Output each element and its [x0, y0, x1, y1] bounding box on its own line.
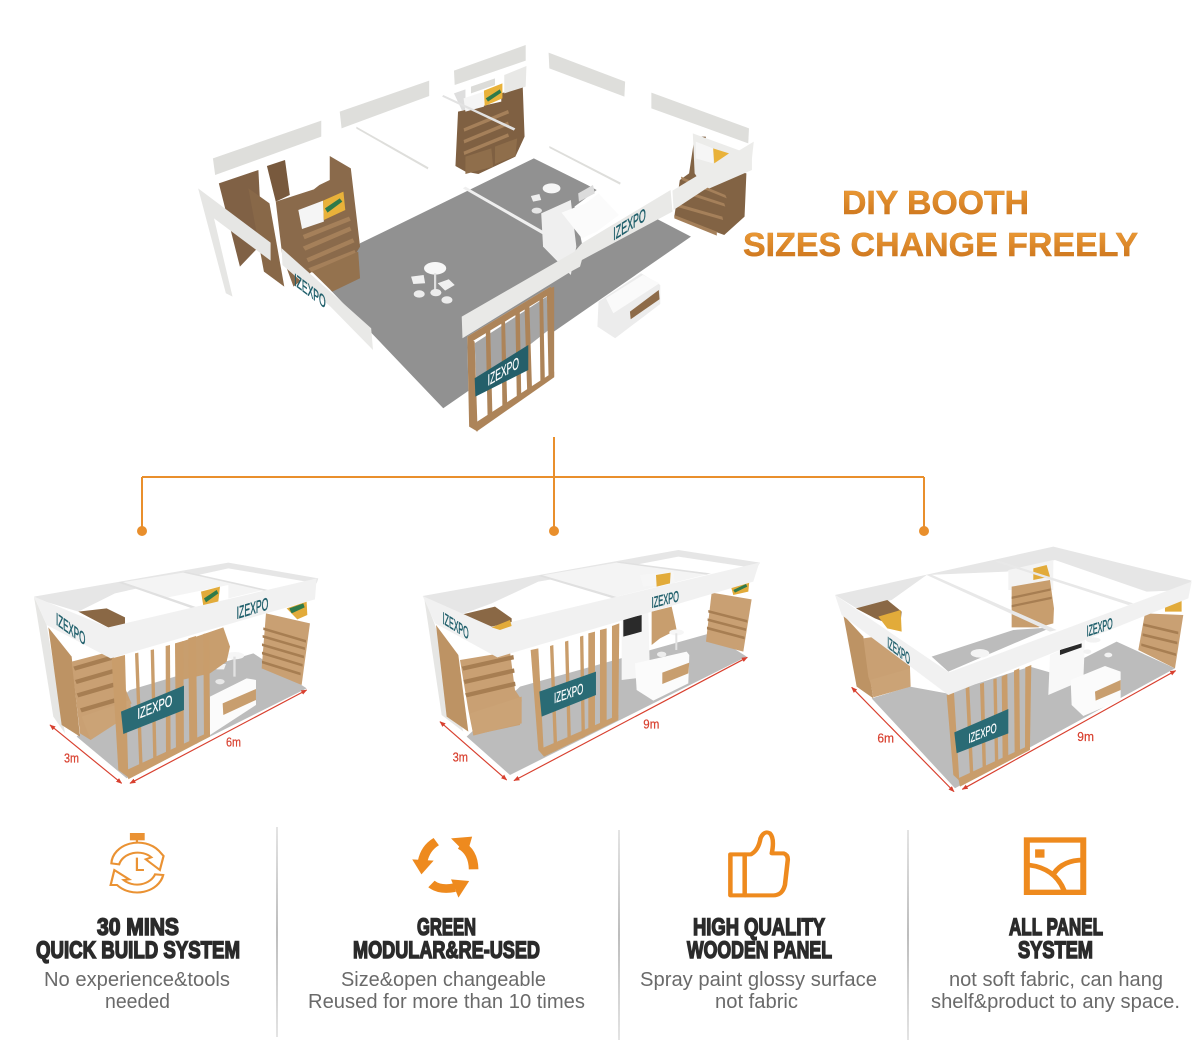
grey floor: [330, 158, 691, 408]
white header: IZEXPO: [1087, 616, 1113, 641]
white header: IZEXPO: [56, 609, 85, 650]
white header: [34, 578, 317, 658]
icon: recycle arrows: [412, 837, 474, 898]
front wood lattice with banner: IZEXPO: [488, 353, 519, 389]
reception: [210, 678, 256, 735]
white header: IZEXPO: [237, 594, 268, 623]
wood display left: [843, 600, 911, 698]
heading: ALL PANEL: [1009, 914, 1103, 941]
feature: wooden panel: not fabric: [715, 991, 798, 1013]
stools: [657, 629, 684, 657]
left front header with logo: IZEXPO: [294, 270, 326, 313]
back shelves: [652, 607, 677, 645]
reception counter: [597, 273, 660, 338]
teal banner: IZEXPO: [137, 693, 172, 723]
feature: all panel: SYSTEM: [1018, 937, 1093, 964]
wood lattice: [112, 633, 210, 779]
booth 3m x 6m: [34, 563, 318, 783]
heading: 30 MINS: [97, 914, 179, 941]
table: [213, 652, 244, 684]
dimension arrows: 6m: [226, 736, 241, 750]
teal banner: IZEXPO: [554, 681, 583, 707]
white header: IZEXPO: [443, 609, 469, 643]
feature: green modular: [308, 837, 585, 1013]
teal banner: [539, 672, 596, 717]
feature: quick build: QUICK BUILD SYSTEM: [36, 937, 240, 964]
dimension arrows: [852, 671, 1176, 792]
reception: [1071, 666, 1121, 716]
title: DIY BOOTH: [842, 184, 1029, 221]
description: Size&open changeable: [341, 969, 546, 991]
booth 6m x 9m: [835, 547, 1192, 792]
wood lattice: [947, 665, 1031, 787]
title: SIZES CHANGE FREELY: [743, 226, 1138, 263]
feature: wooden panel: WOODEN PANEL: [687, 937, 832, 964]
connector lines: [137, 437, 929, 536]
table set in back room: [531, 183, 560, 214]
feature: quick build: [36, 834, 240, 1013]
front right header with logo: [462, 190, 672, 338]
white partition with screen: [622, 612, 650, 680]
teal banner: [121, 686, 184, 734]
white partition: [1048, 640, 1085, 695]
stools: [971, 637, 1112, 658]
white header: [423, 563, 759, 657]
dividers: [276, 827, 909, 1040]
left front header with logo: [282, 248, 373, 350]
back shelf: [1012, 580, 1054, 627]
white header: [835, 561, 1192, 695]
wood display right: [262, 602, 310, 685]
icon: picture panel: [1027, 840, 1083, 892]
white header: IZEXPO: [652, 588, 679, 612]
table and chairs: [411, 262, 455, 304]
partition beam: [463, 187, 559, 242]
feature: quick build: needed: [105, 991, 170, 1013]
right far header: [672, 142, 754, 210]
teal banner: [954, 709, 1008, 753]
centre wood shelf unit: [442, 66, 526, 174]
wood lattice: [531, 623, 619, 757]
description: not soft fabric, can hang: [949, 969, 1163, 991]
left wall frame: [198, 188, 271, 297]
top opening sign: [492, 620, 512, 630]
feature: all panel: shelf&product to any space.: [931, 991, 1180, 1013]
dimension arrows: [50, 690, 307, 783]
wood display left: [436, 607, 522, 736]
feature: green modular: Reused for more than 10 times: [308, 991, 585, 1013]
dimension arrows: 6m: [877, 731, 894, 745]
description: No experience&tools: [44, 969, 230, 991]
feature: wooden panel: [640, 832, 877, 1013]
icon: thumbs up: [730, 832, 788, 895]
feature: all panel: [931, 840, 1180, 1013]
dimension arrows: 9m: [1077, 730, 1094, 744]
heading: HIGH QUALITY: [693, 914, 825, 941]
icon: stopwatch with arrows: [111, 834, 164, 892]
description: Spray paint glossy surface: [640, 969, 877, 991]
front right header with logo: IZEXPO: [613, 205, 646, 245]
right shelf unit: [674, 133, 752, 236]
dimension arrows: 3m: [64, 751, 79, 765]
centre white wall: [541, 185, 619, 275]
reception: [635, 652, 689, 701]
left wood panels: [219, 156, 360, 292]
white header: IZEXPO: [887, 632, 910, 669]
booth 3m x 9m: [423, 550, 760, 781]
dimension arrows: [440, 657, 747, 781]
dimension arrows: 3m: [453, 751, 468, 765]
feature: green modular: MODULAR&RE-USED: [353, 937, 540, 964]
dimension arrows: 9m: [643, 717, 659, 731]
back shelves: [182, 627, 230, 680]
main exploded booth illustration: [198, 45, 754, 432]
title: [743, 184, 1138, 263]
wood display right: [1138, 600, 1183, 668]
front wood lattice with banner: [467, 287, 554, 432]
detached header panels: [213, 45, 749, 185]
teal banner: IZEXPO: [968, 719, 997, 746]
heading: GREEN: [417, 914, 476, 941]
wood display left: [48, 608, 132, 740]
wood display right: [706, 582, 752, 652]
